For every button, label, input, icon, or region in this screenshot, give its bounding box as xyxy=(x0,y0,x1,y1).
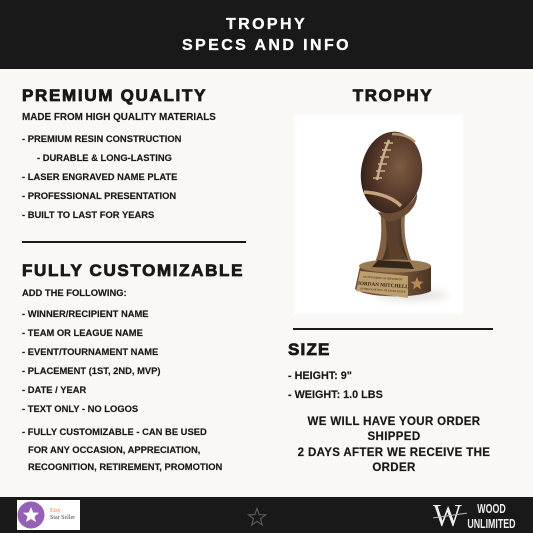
logo: wood unlimited: WOOD xyxy=(477,501,506,516)
customization list: - DATE / YEAR xyxy=(22,384,86,395)
shipping note xyxy=(298,416,490,474)
customization list: - EVENT/TOURNAMENT NAME xyxy=(22,346,158,357)
shipping note: 2 DAYS AFTER WE RECEIVE THE ORDER xyxy=(298,447,490,474)
header title: SPECS AND INFO xyxy=(182,37,351,54)
customization list: - PLACEMENT (1ST, 2ND, MVP) xyxy=(22,365,161,376)
logo: wood unlimited xyxy=(433,497,516,533)
customization list: - TEAM OR LEAGUE NAME xyxy=(22,327,143,338)
quality list: - PROFESSIONAL PRESENTATION xyxy=(22,190,176,201)
trophy base: JORDAN MITCHELL xyxy=(357,281,409,290)
etsy star seller badge xyxy=(17,500,80,530)
size specs: - HEIGHT: 9" xyxy=(288,370,352,382)
customization list: - WINNER/RECIPIENT NAME xyxy=(22,308,149,319)
customization list: FOR ANY OCCASION, APPRECIATION, xyxy=(28,444,200,455)
trophy base: OUTSTANDING ACHIEVEMENT xyxy=(363,276,403,281)
etsy star seller badge: Star Seller xyxy=(50,515,75,521)
heading: premium quality: PREMIUM QUALITY xyxy=(22,86,207,105)
quality list: - LASER ENGRAVED NAME PLATE xyxy=(22,171,177,182)
size specs: - WEIGHT: 1.0 LBS xyxy=(288,389,383,401)
etsy star seller badge: Etsy xyxy=(50,508,61,514)
subheading: add the following: ADD THE FOLLOWING: xyxy=(22,287,127,298)
header band xyxy=(0,0,533,69)
heading: trophy: TROPHY xyxy=(353,86,433,105)
trophy photo xyxy=(294,115,463,314)
customization list: - TEXT ONLY - NO LOGOS xyxy=(22,403,138,414)
customization list: RECOGNITION, RETIREMENT, PROMOTION xyxy=(28,461,222,472)
shipping note: WE WILL HAVE YOUR ORDER SHIPPED xyxy=(308,416,480,443)
quality list: - DURABLE & LONG-LASTING xyxy=(37,152,172,163)
heading: fully customizable: FULLY CUSTOMIZABLE xyxy=(22,261,244,280)
logo: wood unlimited: W xyxy=(433,497,461,533)
trophy stem xyxy=(372,205,414,268)
trophy shadow xyxy=(376,290,448,300)
footer band xyxy=(0,497,533,533)
quality list xyxy=(22,133,181,220)
trophy base: IN RECOGNITION OF EXCELLENCE xyxy=(360,287,406,294)
heading: size: SIZE xyxy=(288,340,331,359)
header title xyxy=(182,16,351,54)
subheading: materials: MADE FROM HIGH QUALITY MATERIALS xyxy=(22,112,216,123)
quality list: - BUILT TO LAST FOR YEARS xyxy=(22,209,154,220)
customization list: - FULLY CUSTOMIZABLE - CAN BE USED xyxy=(22,426,207,437)
header title: TROPHY xyxy=(226,16,307,33)
customization list xyxy=(22,308,222,472)
size specs xyxy=(288,370,383,401)
trophy football xyxy=(356,128,427,222)
quality list: - PREMIUM RESIN CONSTRUCTION xyxy=(22,133,181,144)
logo: wood unlimited: UNLIMITED xyxy=(467,516,516,531)
trophy base xyxy=(355,260,431,298)
icon: footer star xyxy=(247,507,267,526)
